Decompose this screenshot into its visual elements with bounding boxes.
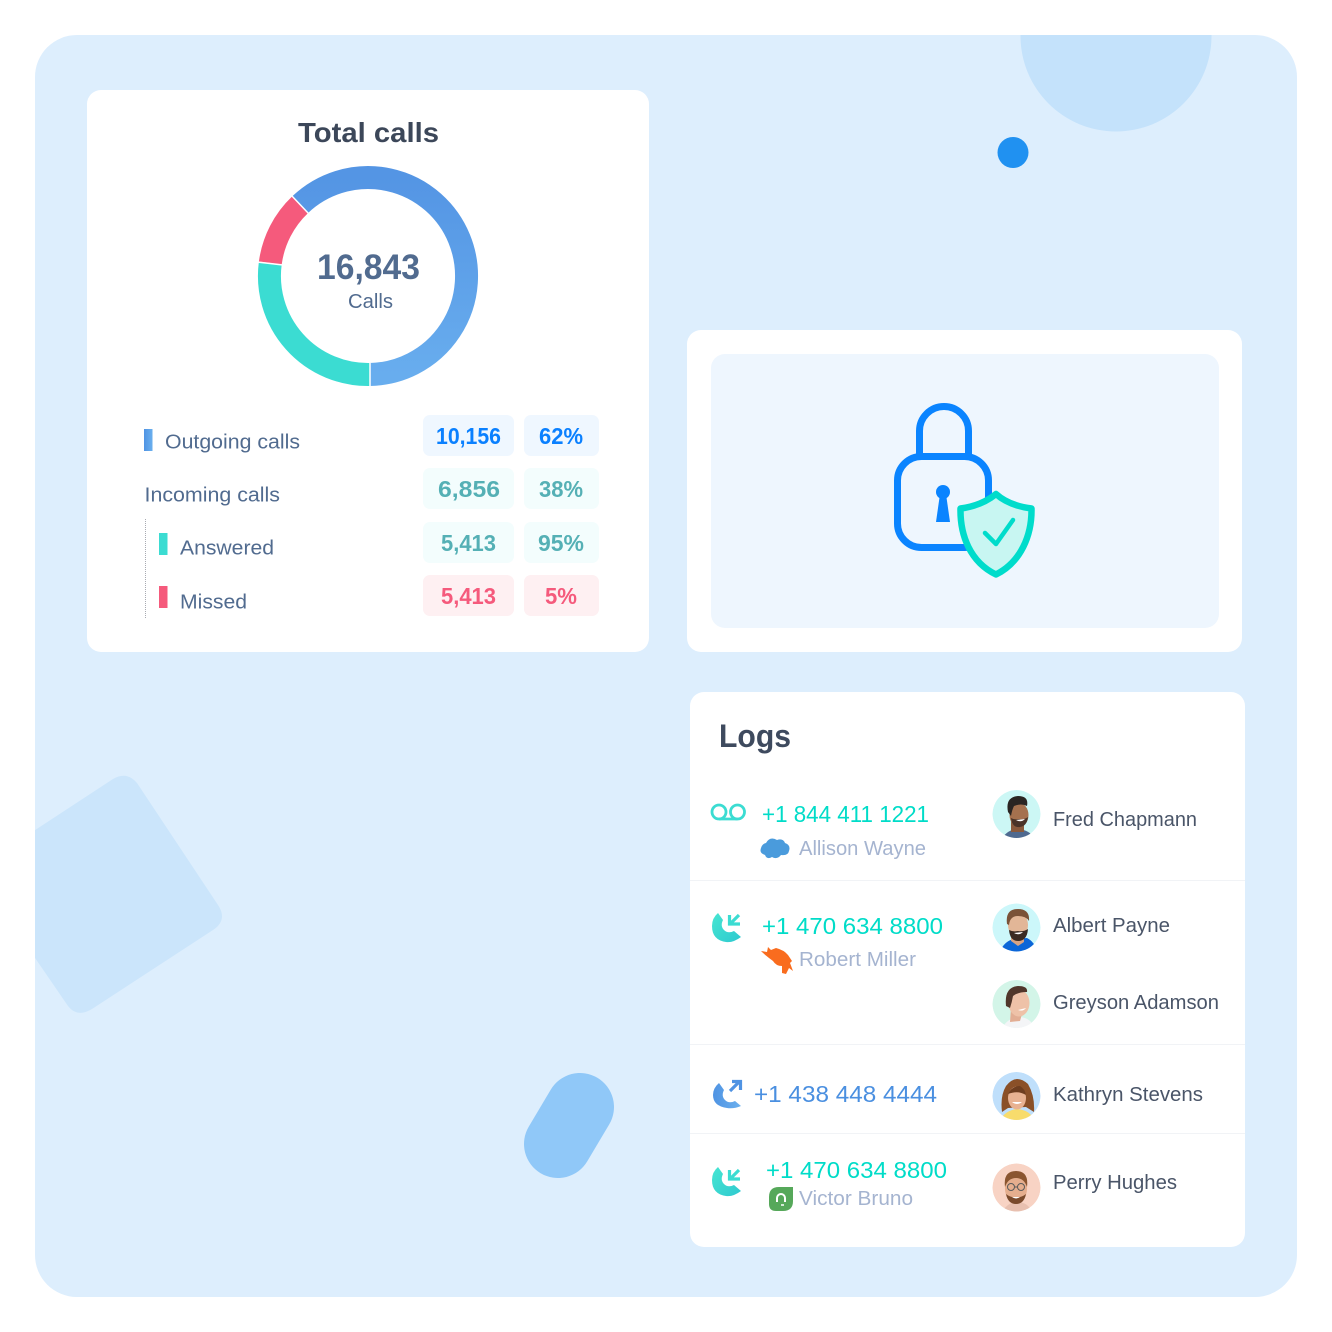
stat chips: 95% — [538, 530, 584, 556]
panel: security — [687, 330, 1242, 652]
phone number 4: +1 470 634 8800 — [766, 1157, 947, 1183]
name: Perry Hughes: Perry Hughes — [1053, 1172, 1177, 1194]
icon: salesforce cloud — [760, 839, 790, 858]
decorative circle — [1020, 35, 1212, 132]
log row 2 — [712, 904, 1219, 1030]
contact: Robert Miller: Robert Miller — [799, 949, 916, 971]
stat chips: 38% — [539, 476, 583, 502]
panel: total calls — [87, 90, 649, 652]
avatar: Kathryn Stevens — [992, 1072, 1040, 1120]
legend labels — [144, 429, 300, 618]
phone number 1: +1 844 411 1221 — [762, 801, 929, 827]
icon: voicemail — [712, 805, 744, 819]
phone number 3: +1 438 448 4444 — [754, 1081, 937, 1107]
stat chips: 5,413 — [441, 530, 496, 556]
legend labels: Missed — [180, 591, 247, 614]
name: Fred Chapmann: Fred Chapmann — [1053, 809, 1197, 831]
stat chips: 62% — [539, 423, 583, 449]
legend labels: Answered — [180, 537, 274, 560]
donut chart — [257, 178, 467, 387]
icon: incoming call — [712, 1167, 741, 1196]
avatar: Fred Chapmann — [992, 790, 1040, 842]
decorative rotated square — [20, 776, 222, 1013]
name: Kathryn Stevens: Kathryn Stevens — [1053, 1084, 1203, 1106]
donut total: 16,843 — [317, 248, 420, 287]
avatar: Albert Payne — [992, 904, 1040, 952]
log row 4 — [712, 1162, 1176, 1212]
name: Albert Payne: Albert Payne — [1053, 915, 1170, 937]
heading: total calls: Total calls — [298, 117, 439, 148]
decorative dot — [998, 137, 1028, 168]
panel: logs — [690, 692, 1245, 1247]
icon: orange bull — [761, 947, 793, 974]
donut total: Calls — [348, 291, 393, 313]
icon: green headset badge — [769, 1187, 793, 1211]
name: Greyson Adamson: Greyson Adamson — [1053, 992, 1219, 1014]
decorative pill — [558, 1107, 580, 1144]
donut total — [317, 248, 420, 313]
icon: outgoing call — [713, 1082, 741, 1108]
log row 1 — [712, 790, 1197, 860]
legend labels: Incoming calls — [144, 484, 280, 507]
stat chips — [423, 415, 599, 616]
phone number 2: +1 470 634 8800 — [762, 913, 943, 939]
contact: Allison Wayne: Allison Wayne — [799, 838, 926, 860]
avatar: Perry Hughes — [992, 1164, 1040, 1212]
icon: incoming call — [712, 913, 741, 942]
icon: shield with check — [960, 494, 1032, 574]
legend labels: Outgoing calls — [165, 431, 300, 454]
stat chips: 5,413 — [441, 583, 496, 609]
stat chips: 6,856 — [438, 476, 500, 502]
avatar: Greyson Adamson — [992, 980, 1040, 1030]
icon: padlock — [898, 406, 988, 548]
heading: logs: Logs — [719, 718, 791, 754]
contact: Victor Bruno: Victor Bruno — [799, 1188, 913, 1210]
stat chips: 10,156 — [436, 423, 501, 449]
stat chips: 5% — [545, 583, 577, 609]
log row 3 — [713, 1072, 1203, 1120]
